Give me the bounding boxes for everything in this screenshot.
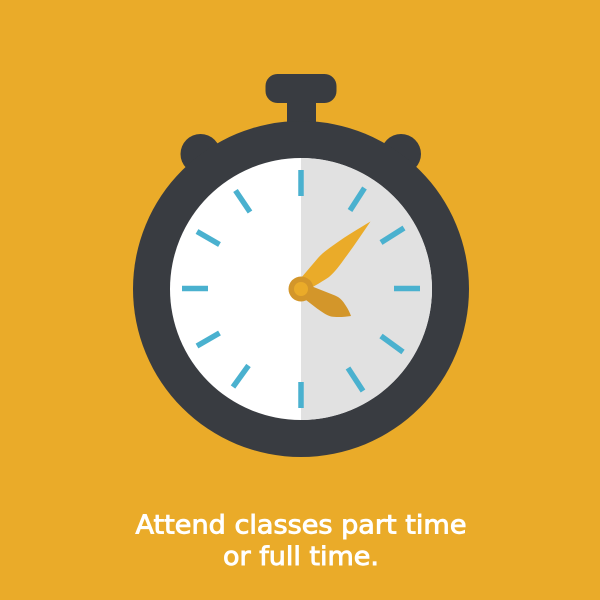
stopwatch — [133, 74, 469, 457]
right side button — [381, 134, 421, 174]
caption — [136, 510, 466, 572]
caption: or full time. — [223, 542, 379, 572]
crown button — [266, 74, 336, 130]
centre pin — [288, 276, 314, 302]
hour hand — [306, 286, 351, 317]
hour ticks — [182, 170, 420, 408]
left side button — [180, 134, 220, 174]
caption: Attend classes part time — [136, 510, 466, 540]
case — [133, 121, 469, 457]
minute hand — [301, 222, 370, 288]
clock face — [170, 158, 432, 420]
